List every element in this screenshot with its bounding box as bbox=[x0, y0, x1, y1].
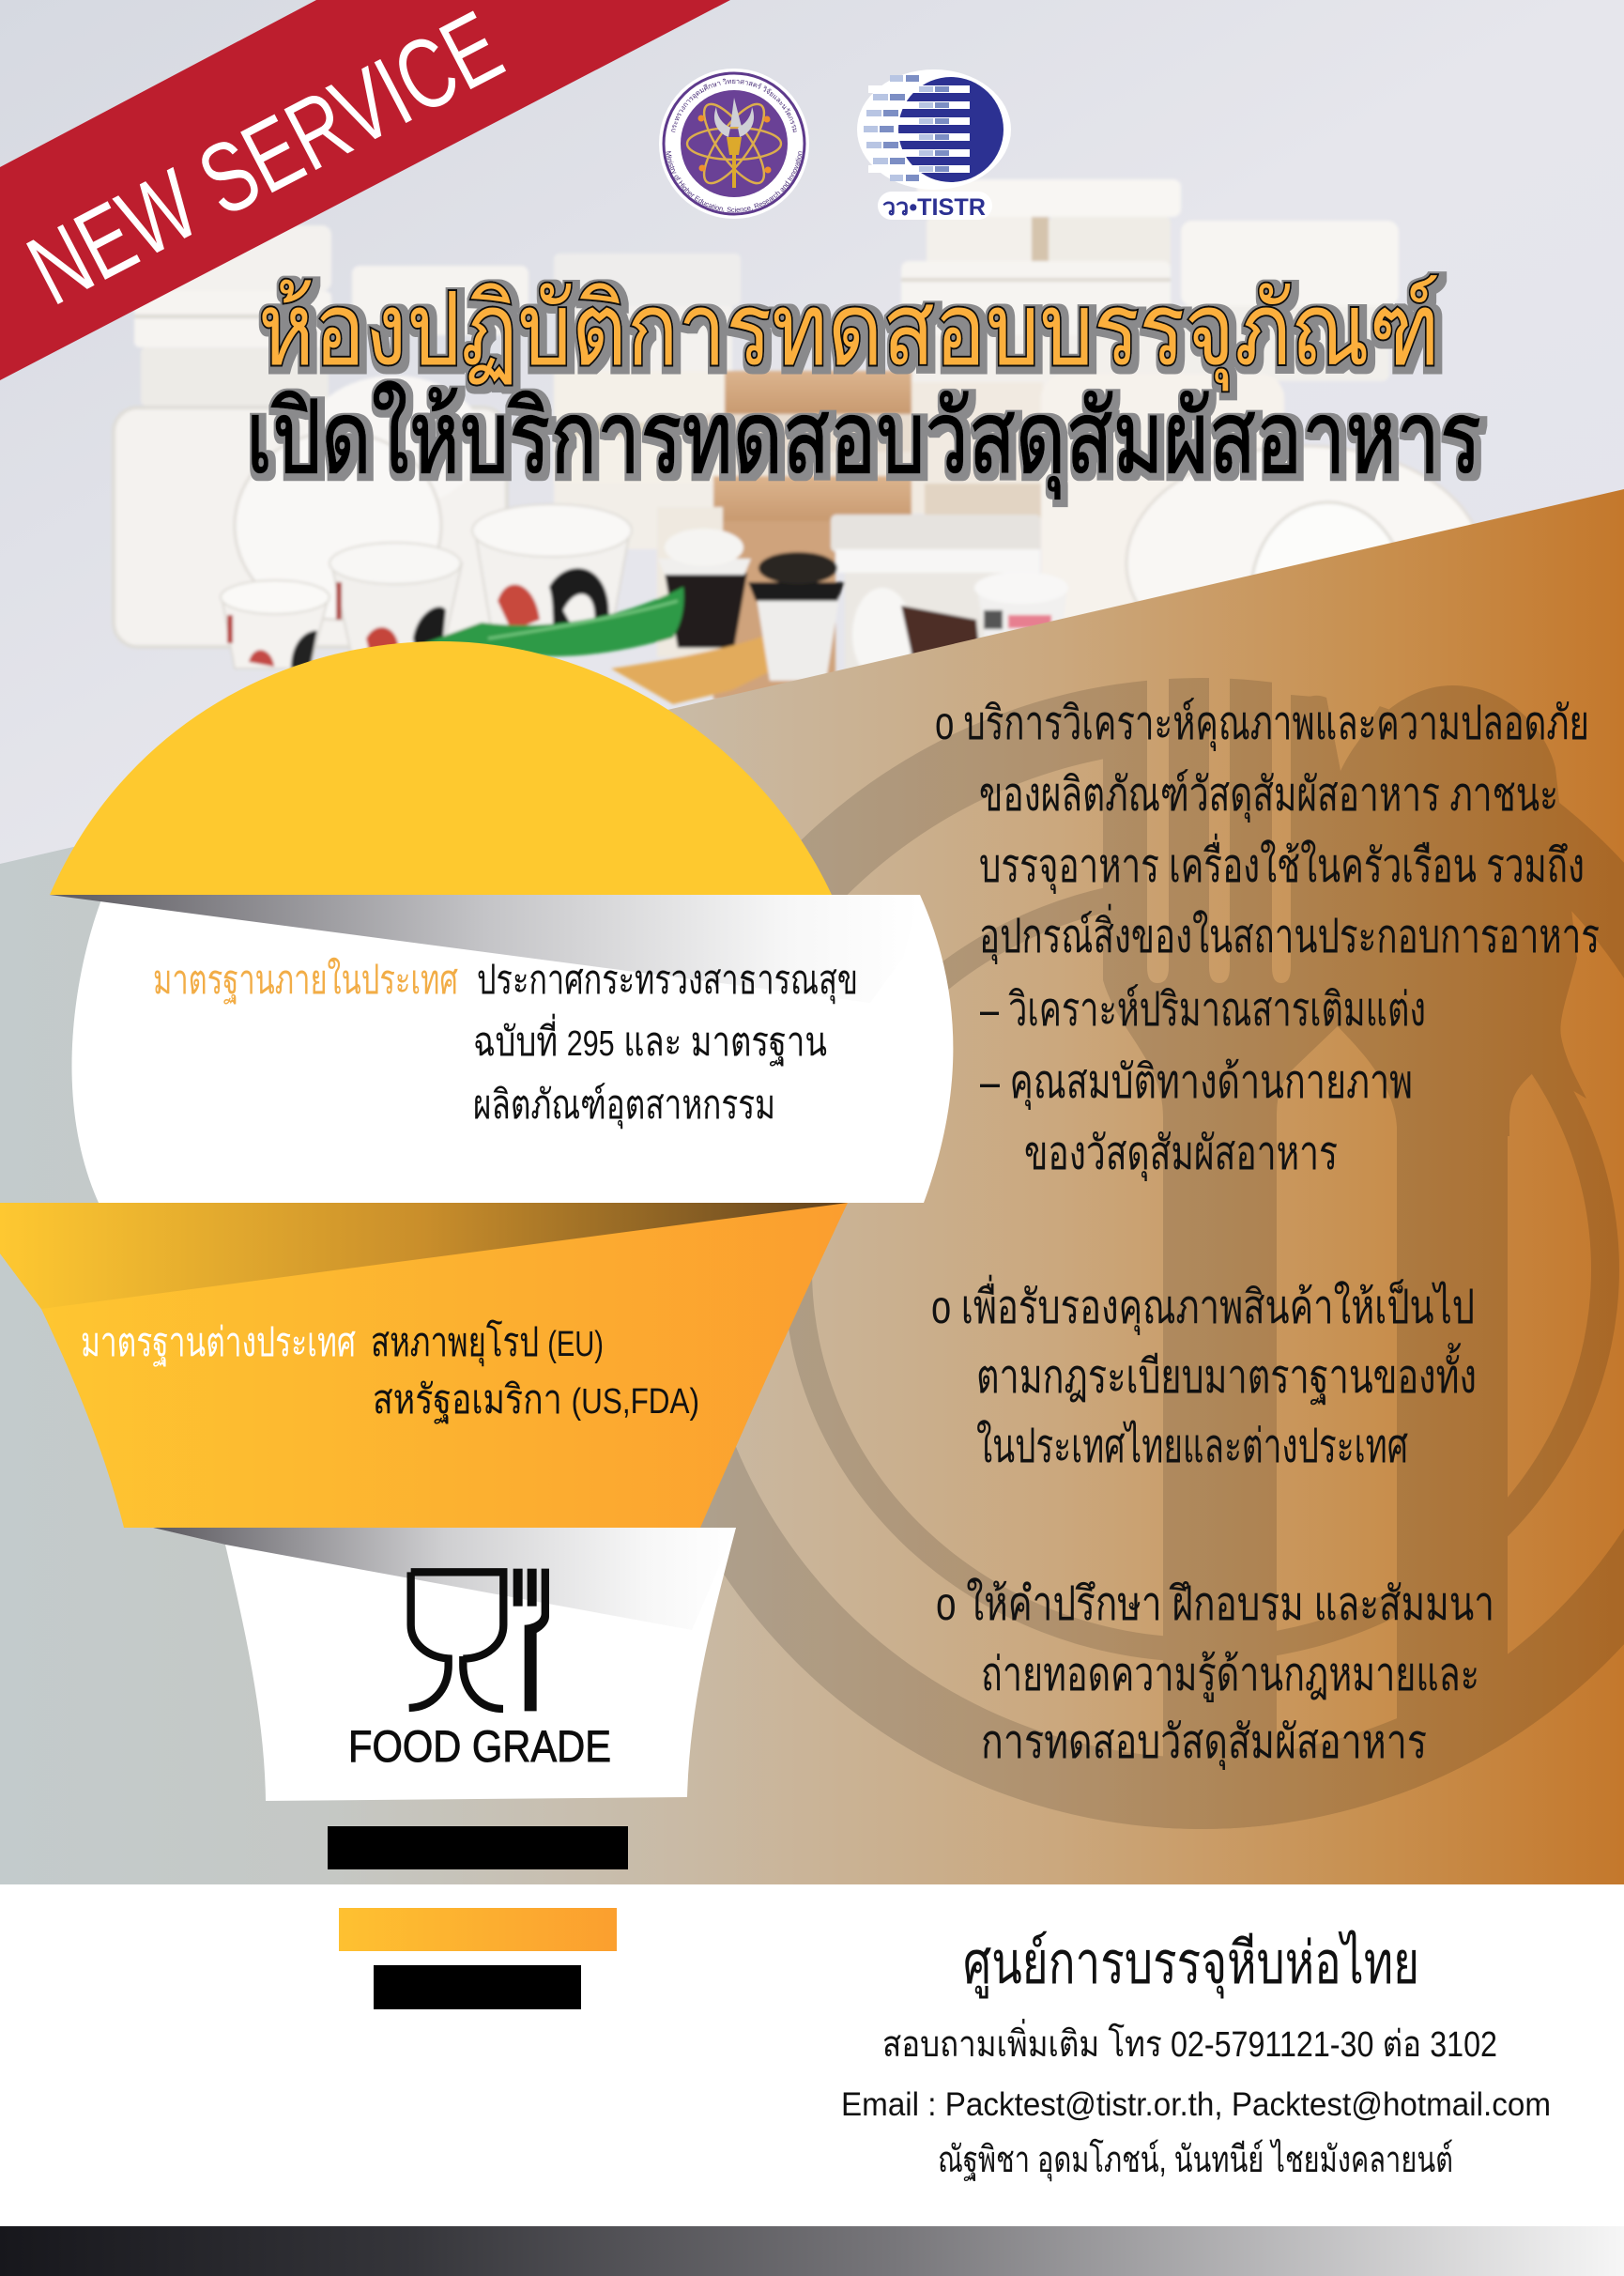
title bbox=[246, 272, 1481, 500]
logo: ministry seal bbox=[659, 69, 809, 219]
text block: certification: ในประเทศไทยและต่างประเทศ bbox=[976, 1420, 1408, 1472]
photo: food packaging products bbox=[114, 179, 1483, 704]
text: domestic standards: ผลิตภัณฑ์อุตสาหกรรม bbox=[473, 1083, 775, 1130]
footer gradient band bbox=[0, 2226, 1624, 2276]
contact details: Email : Packtest@tistr.or.th, Packtest@hotmail.com bbox=[841, 2086, 1551, 2123]
text block: analysis services bbox=[935, 697, 1600, 1181]
contact heading: ศูนย์การบรรจุหีบห่อไทย bbox=[963, 1930, 1419, 1999]
logo: TISTR bbox=[857, 69, 1011, 221]
light bulb: orange base bar bbox=[339, 1908, 617, 1951]
panel: gradient background bbox=[0, 489, 1624, 1884]
icon: glass and fork bbox=[409, 1569, 549, 1711]
light bulb: orange band bbox=[0, 1203, 848, 1528]
logo: ministry seal: กระทรวงการอุดมศึกษา วิทยาศาสตร์ วิจัยและนวัตกรรม bbox=[671, 79, 797, 132]
text block: certification: ตามกฎระเบียบมาตราฐานของทั้ง bbox=[976, 1343, 1477, 1405]
text: international standards: มาตรฐานต่างประเทศ bbox=[81, 1320, 356, 1366]
contact details: ณัฐพิชา อุดมโภชน์, นันทนีย์ ไชยมังคลายนต์ bbox=[938, 2139, 1453, 2182]
text block: analysis services: – คุณสมบัติทางด้านกายภาพ bbox=[980, 1055, 1413, 1110]
trident bbox=[714, 98, 754, 137]
text: international standards: สหภาพยุโรป (EU) bbox=[371, 1319, 604, 1367]
light bulb: black base bar bbox=[328, 1826, 628, 1869]
text block: certification bbox=[931, 1275, 1477, 1472]
text: domestic standards: ประกาศกระทรวงสาธารณสุข bbox=[477, 958, 858, 1005]
text block: analysis services: ของวัสดุสัมผัสอาหาร bbox=[1024, 1127, 1338, 1181]
watermark: plate, fork and spoon bbox=[626, 678, 1624, 1850]
light bulb: black tip bar bbox=[374, 1965, 581, 2009]
text block: consulting: การทดสอบวัสดุสัมผัสอาหาร bbox=[981, 1715, 1427, 1770]
black coffee cup with white lid bbox=[665, 573, 747, 648]
contact details bbox=[841, 2019, 1551, 2182]
cup with rooster, large bbox=[474, 526, 631, 638]
background: photo backdrop bbox=[0, 0, 1624, 939]
logo: ministry seal: Ministry of Higher Education, Science, Research and Innovation bbox=[666, 151, 802, 212]
label: food grade: FOOD GRADE bbox=[348, 1721, 611, 1771]
atom orbits bbox=[687, 96, 781, 192]
white cup with black lid bbox=[756, 592, 840, 681]
text: domestic standards: มาตรฐานภายในประเทศ bbox=[153, 957, 458, 1004]
wooden tray bbox=[611, 630, 782, 704]
contact details: สอบถามเพิ่มเติม โทร 02-5791121-30 ต่อ 3102 bbox=[882, 2019, 1497, 2065]
text block: consulting bbox=[936, 1577, 1494, 1770]
text block: consulting: ถ่ายทอดความรู้ด้านกฎหมายและ bbox=[981, 1648, 1479, 1702]
cup with rooster, small bbox=[222, 596, 329, 669]
light bulb: white band bbox=[50, 895, 953, 1203]
text: domestic standards bbox=[153, 957, 858, 1130]
light bulb: white base with food grade symbol bbox=[153, 1528, 736, 1801]
coffee cup bbox=[977, 587, 1067, 642]
text: domestic standards: ฉบับที่ 295 และ มาตรฐาน bbox=[473, 1014, 827, 1066]
light bulb: yellow dome bbox=[50, 641, 832, 895]
text block: analysis services: – วิเคราะห์ปริมาณสารเติมแต่ง bbox=[980, 983, 1426, 1036]
white footer area bbox=[0, 1884, 1624, 2276]
text block: certification: o เพื่อรับรองคุณภาพสินค้าให้เป็นไป bbox=[931, 1275, 1475, 1335]
logo stripes bbox=[868, 85, 970, 173]
green banana leaf bbox=[424, 587, 683, 656]
logo wordmark: วว•TISTR bbox=[882, 194, 986, 221]
tilted brown cup bbox=[852, 588, 912, 682]
text: international standards bbox=[81, 1319, 699, 1423]
cup with rooster, medium bbox=[331, 563, 462, 657]
text: international standards: สหรัฐอเมริกา (US,FDA) bbox=[373, 1377, 699, 1423]
